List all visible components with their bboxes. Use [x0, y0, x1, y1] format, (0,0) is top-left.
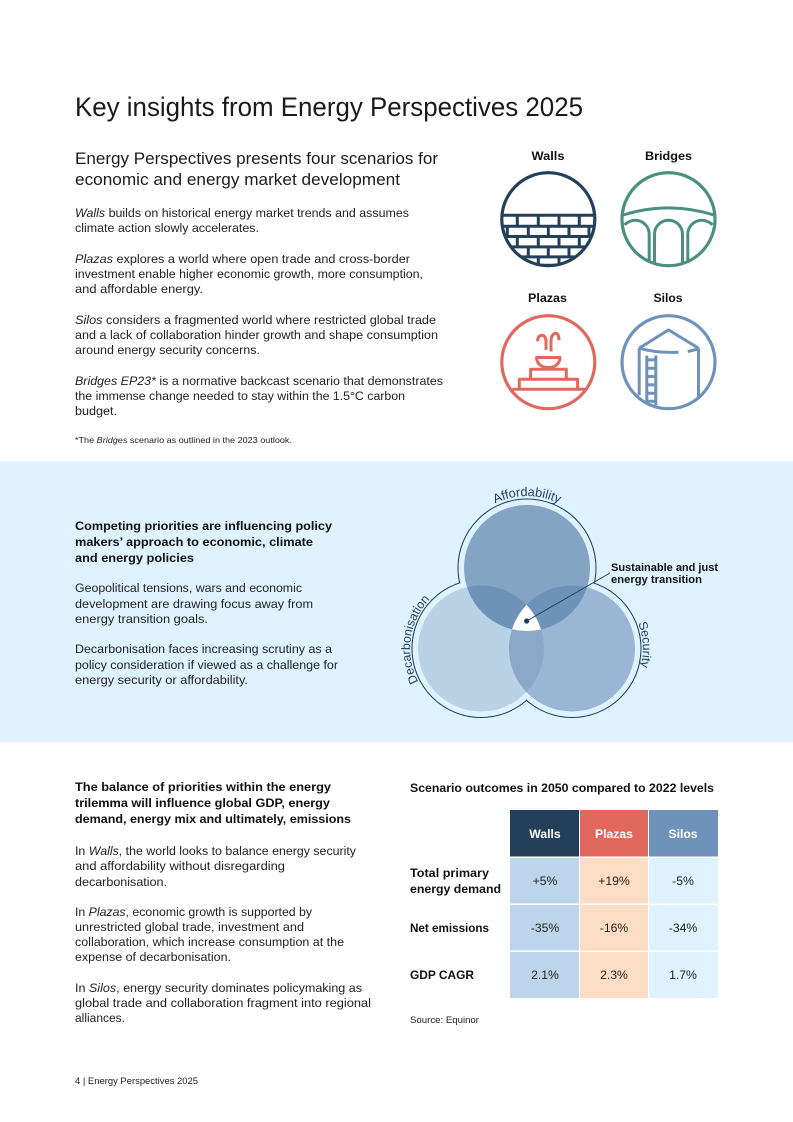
footnote: *The Bridges scenario as outlined in the 2023 outlook. — [75, 435, 292, 445]
table: scenario outcomes: Total primary — [410, 866, 489, 880]
text: scenario priorities: collaboration, which increase consumption at the — [75, 935, 344, 949]
text: scenario descriptions — [75, 206, 443, 418]
icon: plazas — [502, 291, 595, 409]
text: policy focus: Geopolitical tensions, wars and economic — [75, 581, 302, 595]
text: scenario descriptions: budget. — [75, 404, 117, 418]
text: scenario descriptions: and affordable energy. — [75, 282, 203, 296]
heading: balance of priorities: The balance of priorities within the energy — [75, 780, 331, 794]
icon: bridges: Bridges — [645, 149, 692, 163]
text: scenario priorities: and affordability without disregarding — [75, 859, 285, 873]
icon: silos: Silos — [654, 291, 683, 305]
text: scenario priorities: decarbonisation. — [75, 875, 167, 889]
text: scenario priorities — [75, 844, 371, 1025]
text: scenario descriptions: Plazas explores a world where open trade and cross-border — [75, 252, 410, 266]
text: policy focus: policy consideration if viewed as a challenge for — [75, 658, 338, 672]
text: policy focus: energy transition goals. — [75, 612, 208, 626]
heading: competing priorities: Competing priorities are influencing policy — [75, 519, 332, 533]
table: scenario outcomes: Walls — [529, 827, 561, 841]
callout: sustainable and just energy transition: Sustainable and just — [611, 562, 718, 574]
table: scenario outcomes: Silos — [668, 827, 698, 841]
label: affordability: Affordability — [494, 486, 562, 504]
table: scenario outcomes: 1.7% — [669, 968, 697, 982]
text: scenario descriptions: climate action slowly accelerates. — [75, 221, 259, 235]
callout: sustainable and just energy transition — [611, 562, 718, 586]
heading: competing priorities: makers’ approach to economic, climate — [75, 535, 313, 549]
table: scenario outcomes: -34% — [669, 921, 697, 935]
table: scenario outcomes: GDP CAGR — [410, 968, 474, 982]
table: scenario outcomes: -5% — [672, 874, 694, 888]
footer: 4 | Energy Perspectives 2025 — [75, 1076, 198, 1086]
icon: bridges — [622, 149, 715, 266]
heading: balance of priorities: demand, energy mix and ultimately, emissions — [75, 812, 351, 826]
label: decarbonisation: Decarbonisation — [401, 596, 430, 684]
panel: competing priorities — [0, 461, 793, 742]
source note: Source: Equinor — [410, 1015, 479, 1025]
table title: Scenario outcomes in 2050 compared to 2022 levels — [410, 781, 714, 795]
subheading — [75, 149, 438, 189]
text: policy focus: energy security or affordability. — [75, 673, 248, 687]
table: scenario outcomes: +5% — [533, 874, 558, 888]
text: scenario priorities: In Walls, the world looks to balance energy security — [75, 844, 357, 858]
text: policy focus: Decarbonisation faces increasing scrutiny as a — [75, 642, 332, 656]
title: Key insights from Energy Perspectives 2025 — [75, 92, 583, 122]
text: scenario descriptions: Bridges EP23* is a normative backcast scenario that demonstrates — [75, 374, 443, 388]
text: scenario descriptions: the immense change needed to stay within the 1.5°C carbon — [75, 389, 405, 403]
text: scenario priorities: In Silos, energy security dominates policymaking as — [75, 981, 362, 995]
table: scenario outcomes: 2.3% — [600, 968, 628, 982]
subheading: Energy Perspectives presents four scenarios for — [75, 149, 438, 168]
table: scenario outcomes: -35% — [531, 921, 559, 935]
text: scenario descriptions: and a lack of collaboration hinder growth and shape consumption — [75, 328, 438, 342]
callout: sustainable and just energy transition: energy transition — [611, 574, 702, 586]
text: policy focus: development are drawing focus away from — [75, 597, 313, 611]
heading: balance of priorities — [75, 780, 351, 826]
text: scenario priorities: unrestricted global trade, investment and — [75, 920, 304, 934]
icon: plazas: Plazas — [528, 291, 567, 305]
text: scenario descriptions: Silos considers a fragmented world where restricted global trade — [75, 313, 436, 327]
text: scenario descriptions: Walls builds on historical energy market trends and assumes — [75, 206, 409, 220]
text: scenario priorities: global trade and collaboration fragment into regional — [75, 996, 371, 1010]
table: scenario outcomes: 2.1% — [531, 968, 559, 982]
icon: walls — [498, 149, 598, 266]
chart: energy trilemma venn diagram — [401, 486, 718, 718]
text: scenario priorities: expense of decarbonisation. — [75, 950, 231, 964]
text: policy focus — [75, 581, 338, 687]
table: scenario outcomes: Plazas — [595, 827, 633, 841]
table: scenario outcomes — [410, 781, 718, 1025]
icon: silos — [622, 291, 715, 409]
table: scenario outcomes: Net emissions — [410, 921, 489, 935]
text: scenario descriptions: around energy security concerns. — [75, 343, 260, 357]
table: scenario outcomes: -16% — [600, 921, 628, 935]
icon: walls: Walls — [532, 149, 565, 163]
table: scenario outcomes: energy demand — [410, 882, 501, 896]
text: scenario priorities: alliances. — [75, 1011, 125, 1025]
table: scenario outcomes: +19% — [598, 874, 630, 888]
text: scenario priorities: In Plazas, economic growth is supported by — [75, 905, 313, 919]
heading: competing priorities: and energy policies — [75, 551, 194, 565]
subheading: economic and energy market development — [75, 170, 400, 189]
text: scenario descriptions: investment enable higher economic growth, more consumption, — [75, 267, 423, 281]
heading: competing priorities — [75, 519, 332, 565]
heading: balance of priorities: trilemma will influence global GDP, energy — [75, 796, 330, 810]
label: security: Security — [639, 622, 652, 668]
